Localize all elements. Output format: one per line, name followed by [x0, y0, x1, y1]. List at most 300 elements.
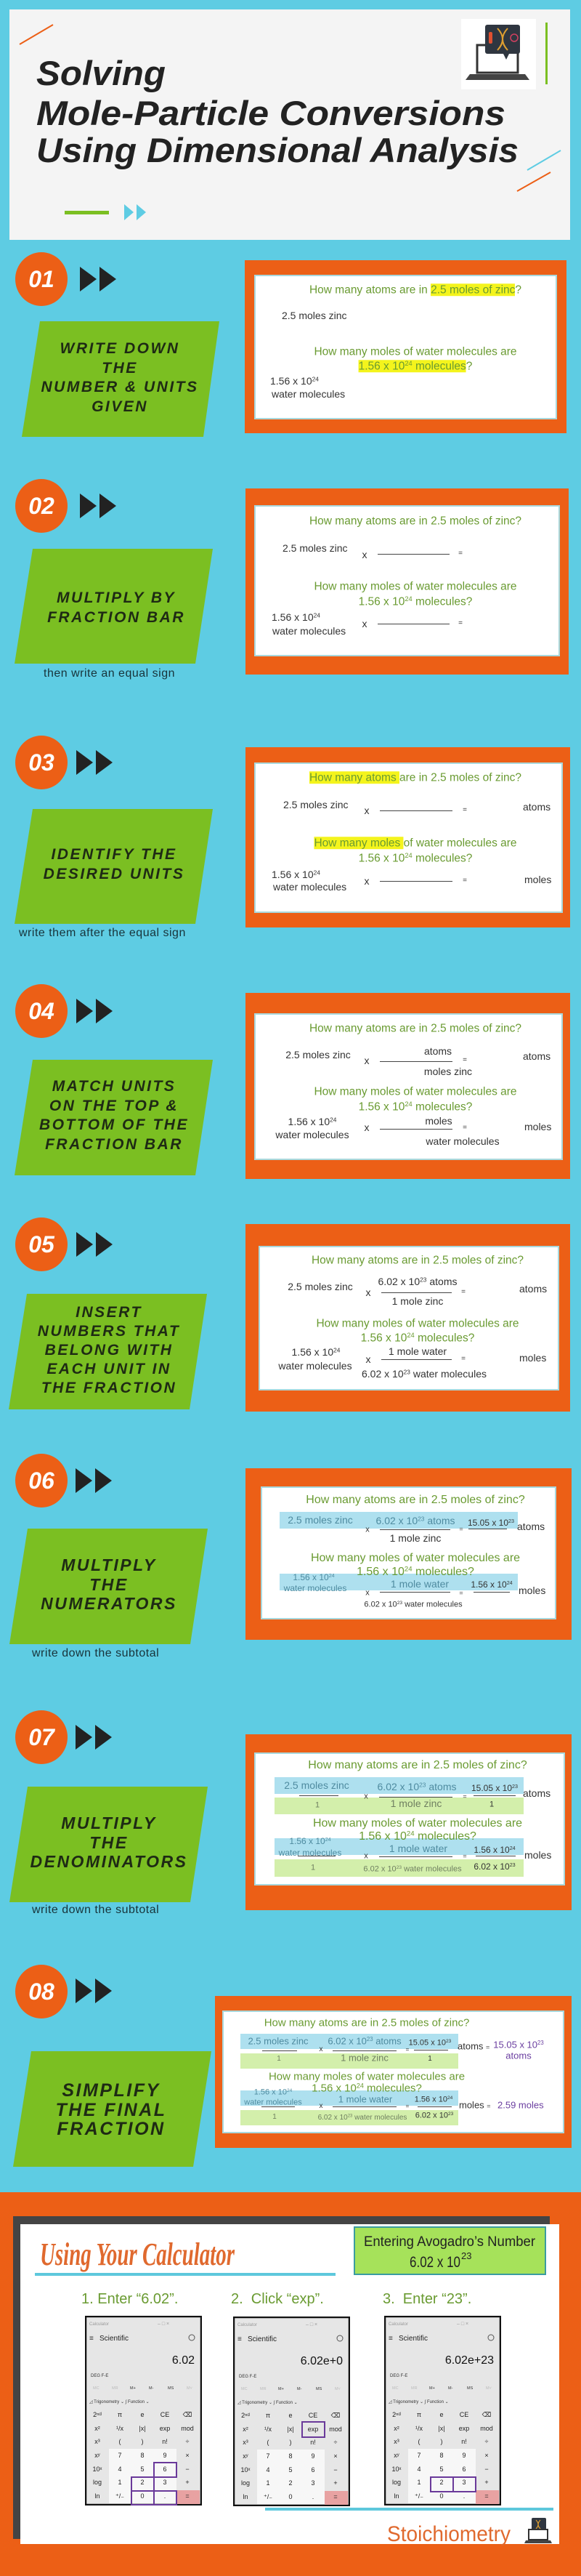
title: Solving — [36, 54, 166, 92]
calculator 2: 6 — [311, 2466, 315, 2474]
step 02: = — [458, 619, 463, 627]
step 08: 1.56 x 1024 — [254, 2088, 292, 2096]
badge 03: 03 — [28, 749, 54, 775]
calculator 3: M˅ — [486, 2386, 492, 2391]
step 04: MATCH UNITS — [52, 1078, 176, 1095]
calculator 3: 0 — [439, 2492, 444, 2500]
calculator 3: π — [417, 2411, 421, 2418]
calculator 3: 5 — [439, 2466, 444, 2473]
example panel 04 — [245, 993, 570, 1179]
calculator 1: xʸ — [94, 2452, 100, 2459]
calculator 1: mod — [181, 2425, 194, 2432]
calculator 3: 3 — [462, 2479, 466, 2486]
step 07: 1.56 x 1024 — [474, 1845, 516, 1855]
step 05: x — [366, 1353, 370, 1365]
calculator 1: |x| — [139, 2425, 146, 2432]
calculator 1: 10ˣ — [93, 2466, 102, 2473]
step 03 — [15, 736, 570, 939]
calculator 3: ◿ Trigonometry ⌄ ∫ Function ⌄ — [389, 2399, 449, 2404]
step 05: atoms — [519, 1283, 547, 1295]
step 01 — [15, 252, 566, 437]
step 03: = — [463, 877, 467, 885]
step 07: 6.02 x 1023 atoms — [378, 1781, 456, 1792]
calculator 3: 7 — [417, 2452, 421, 2459]
calculator 3: ⁺/₋ — [415, 2492, 423, 2500]
calculator 3: 2 — [439, 2479, 444, 2486]
step 06 — [9, 1454, 572, 1659]
calculator 1: = — [185, 2492, 190, 2500]
step 04: water molecules — [426, 1135, 500, 1147]
calculator 1: ) — [141, 2438, 144, 2445]
badge 07: 07 — [28, 1724, 54, 1750]
arrows — [76, 1468, 112, 1493]
calculator 1: n! — [162, 2438, 168, 2445]
badge 06: 06 — [28, 1467, 54, 1493]
step 01: 1.56 x 1024 molecules? — [359, 360, 472, 372]
step 04: moles — [524, 1121, 551, 1132]
badge 05: 05 — [28, 1231, 54, 1257]
calculator 3: 2ⁿᵈ — [392, 2411, 401, 2418]
calculator 2: x² — [243, 2426, 248, 2433]
calculator 3: − — [484, 2466, 489, 2473]
step 08: 15.05 x 1023 — [409, 2038, 451, 2047]
calculator 3: e — [439, 2411, 444, 2418]
step 07: 1.56 x 1024 molecules? — [359, 1830, 476, 1843]
step 05: x — [366, 1287, 370, 1298]
step 05: 6.02 x 1023 atoms — [378, 1276, 457, 1287]
step 06: = — [459, 1525, 463, 1532]
calculator 2: 4 — [266, 2466, 270, 2474]
step 02: = — [458, 550, 463, 558]
step 02: x — [362, 549, 367, 560]
badge 03 — [15, 736, 68, 789]
step 04: atoms — [523, 1050, 550, 1062]
calculator 3: n! — [461, 2438, 467, 2445]
calculator 3: 8 — [439, 2452, 444, 2459]
step 07: atoms — [523, 1787, 550, 1799]
step 08: How many atoms are in 2.5 moles of zinc? — [264, 2016, 469, 2029]
calculator 1: + — [185, 2479, 190, 2486]
calculator section — [0, 2192, 581, 2576]
calculator 2: ÷ — [334, 2439, 338, 2446]
calculator 2: x³ — [243, 2439, 248, 2446]
calculator 3: CE — [460, 2411, 468, 2418]
calculator 3: ln — [394, 2492, 399, 2500]
step 07: 15.05 x 1023 — [471, 1783, 518, 1793]
badge 04 — [15, 984, 68, 1038]
label: multiply numerators — [9, 1529, 208, 1644]
calculator 1: e — [140, 2411, 145, 2418]
label: write down — [22, 321, 220, 437]
badge 02: 02 — [28, 493, 54, 519]
calculator 2: ⁺/₋ — [264, 2493, 272, 2500]
example panel 08 — [215, 1996, 572, 2148]
calculator 2: mod — [329, 2426, 342, 2433]
step 05: 1.56 x 1024 — [292, 1346, 340, 1358]
step 08: 1 mole zinc — [341, 2053, 389, 2063]
step 02: 2.5 moles zinc — [283, 542, 347, 554]
calculator 2: M+ — [278, 2387, 284, 2391]
step 03: = — [463, 806, 467, 814]
title: Using Dimensional Analysis — [36, 131, 519, 169]
step 02: 1.56 x 1024 molecules? — [359, 595, 472, 608]
calculator 3 — [384, 2316, 501, 2505]
calculator 2: DEG F-E — [239, 2375, 256, 2379]
step 03: x — [365, 875, 369, 887]
calculator 2: ◿ Trigonometry ⌄ ∫ Function ⌄ — [237, 2400, 298, 2405]
step 01: water molecules — [272, 388, 345, 400]
step 04 — [15, 984, 570, 1179]
calculator 3: DEG F-E — [390, 2374, 407, 2378]
step 05: = — [461, 1355, 466, 1363]
calculator 1: ⌫ — [183, 2411, 192, 2418]
step 08: moles = — [459, 2099, 491, 2111]
step 08: 2.59 moles — [497, 2099, 544, 2111]
calculator 3: ≡ — [389, 2335, 393, 2343]
example panel 06 — [245, 1468, 572, 1640]
step 07: MULTIPLY — [61, 1814, 157, 1832]
step 03: How many atoms are in 2.5 moles of zinc? — [309, 771, 521, 784]
step 06: water molecules — [284, 1583, 346, 1593]
step 06: 1.56 x 1024 — [471, 1579, 513, 1590]
step 05: = — [461, 1288, 466, 1296]
step 03: water molecules — [273, 881, 346, 893]
calculator 2 — [233, 2317, 350, 2506]
step 06: How many moles of water molecules are — [311, 1552, 520, 1564]
calculator 1: ≡ — [89, 2335, 94, 2343]
calculator 2: 5 — [288, 2466, 293, 2474]
subtitle: write down the subtotal — [32, 1647, 159, 1659]
calculator 1: 3 — [163, 2479, 167, 2486]
step 07: x — [364, 1852, 368, 1861]
calculator 2: 8 — [288, 2452, 293, 2460]
header panel — [9, 9, 570, 240]
calculator 2: MR — [260, 2387, 267, 2391]
calculator 3: |x| — [438, 2425, 445, 2432]
step 04: = — [463, 1124, 467, 1132]
calculator 1: 2ⁿᵈ — [93, 2411, 102, 2418]
calculator 3: Scientific — [399, 2335, 428, 2343]
step 05: EACH UNIT IN — [46, 1361, 171, 1377]
step 06: 1 mole water — [391, 1578, 449, 1590]
step 06: 2.5 moles zinc — [288, 1514, 353, 1526]
step 07: 1 — [315, 1801, 320, 1810]
step 05: 6.02 x 1023 water molecules — [362, 1368, 487, 1380]
step 01: 1.56 x 1024 — [270, 375, 319, 387]
decoration: dash and arrows — [65, 211, 109, 214]
step 04: FRACTION BAR — [45, 1135, 183, 1153]
step 08: = — [406, 2103, 409, 2109]
step 06: 1.56 x 1024 — [293, 1572, 335, 1582]
calculator 2: 7 — [266, 2452, 270, 2460]
calculator 1: M˅ — [187, 2386, 192, 2391]
calculator 2: 10ˣ — [241, 2466, 251, 2474]
step 05: 1 mole zinc — [392, 1295, 443, 1307]
step 08: atoms = — [458, 2041, 489, 2051]
subtitle: then write an equal sign — [44, 667, 175, 680]
calculator 3: 6 — [462, 2466, 466, 2473]
step 03: How many moles of water molecules are — [314, 837, 517, 849]
calculator 3: . — [463, 2492, 465, 2500]
step 08: 6.02 x 1023 — [415, 2111, 453, 2120]
step 01: GIVEN — [92, 398, 148, 414]
step 08: = — [406, 2046, 409, 2053]
example panel 03 — [245, 747, 570, 927]
step 04: How many atoms are in 2.5 moles of zinc? — [309, 1022, 521, 1034]
calculator 3: MR — [411, 2386, 418, 2391]
step 01: How many atoms are in 2.5 moles of zinc? — [309, 283, 521, 296]
step 07: 1 — [489, 1800, 494, 1808]
calculator 2: Calculator — [237, 2323, 257, 2327]
calculator 3: 6.02e+23 — [445, 2354, 494, 2367]
step 07: = — [463, 1852, 467, 1859]
example panel 05 — [245, 1224, 570, 1412]
calculator 3: MS — [467, 2386, 474, 2391]
calculator 2: log — [241, 2479, 250, 2487]
label: insert numbers — [9, 1294, 208, 1409]
step 05: 1.56 x 1024 molecules? — [361, 1332, 474, 1344]
badge 01: 01 — [28, 266, 54, 292]
step 04: atoms — [424, 1045, 452, 1057]
badge 05 — [15, 1217, 68, 1271]
arrows — [76, 999, 113, 1023]
arrows — [76, 1232, 113, 1257]
step 08: 6.02 x 1023 water molecules — [318, 2114, 407, 2122]
calculator 2: M˅ — [335, 2387, 341, 2391]
step 02: FRACTION BAR — [47, 609, 185, 625]
calculator 1: 2 — [140, 2479, 145, 2486]
step 01: How many moles of water molecules are — [314, 345, 517, 358]
arrows — [80, 494, 116, 518]
step 02 — [15, 479, 569, 680]
badge 02 — [15, 479, 68, 533]
callout: avogadro's number — [354, 2226, 546, 2275]
badge 06 — [15, 1454, 68, 1508]
step 08: 1 — [272, 2113, 277, 2121]
step 05: water molecules — [278, 1360, 352, 1372]
calculator 2: ( — [267, 2439, 269, 2446]
calculator 3: – □ × — [457, 2322, 468, 2327]
example panel 02 — [245, 488, 569, 675]
icon: small laptop — [524, 2518, 552, 2543]
calculator 1: log — [93, 2479, 102, 2486]
calculator 3: 9 — [462, 2452, 466, 2459]
step 04: = — [463, 1056, 467, 1064]
calculator 1: ¹/x — [116, 2425, 123, 2432]
step 08: water molecules — [244, 2098, 302, 2106]
label: match units — [15, 1060, 214, 1175]
calculator 3: xʸ — [394, 2452, 399, 2459]
step 07: moles — [524, 1849, 551, 1861]
step 06: MULTIPLY — [61, 1555, 157, 1574]
step 03: IDENTIFY THE — [51, 846, 177, 863]
step 08: SIMPLIFY — [62, 2080, 161, 2101]
step 08: 1.56 x 1024 molecules? — [312, 2082, 422, 2095]
step 01: THE — [102, 359, 138, 377]
calculator 2: . — [312, 2493, 314, 2500]
calculator 2: ≡ — [237, 2335, 242, 2343]
step 03: 2.5 moles zinc — [283, 799, 348, 810]
calculator 1: ÷ — [186, 2438, 190, 2445]
calculator 3: 4 — [417, 2466, 421, 2473]
step 07: = — [463, 1792, 467, 1800]
calculator 3: ⌫ — [482, 2411, 492, 2418]
calculator 1: x² — [94, 2425, 100, 2432]
calculator 2: exp — [308, 2426, 318, 2433]
calculator 3: ¹/x — [415, 2425, 423, 2432]
step 07: 1 mole water — [389, 1843, 447, 1854]
step 08: 1 — [428, 2055, 432, 2063]
step 04: x — [365, 1122, 369, 1133]
calculator 3: x² — [394, 2425, 399, 2432]
calculator 2: M- — [297, 2387, 302, 2391]
calculator 1: Calculator — [89, 2322, 109, 2327]
calculator 3: mod — [480, 2425, 493, 2432]
step 05: THE FRACTION — [41, 1380, 176, 1396]
calculator 1: 5 — [140, 2466, 145, 2473]
calculator 2: xʸ — [243, 2452, 248, 2460]
step 04: moles zinc — [424, 1066, 472, 1077]
calculator section: 3. Enter “23”. — [383, 2291, 471, 2307]
step 07: How many moles of water molecules are — [313, 1817, 522, 1830]
calculator 2: ⌫ — [331, 2412, 341, 2419]
step 07: x — [364, 1792, 368, 1801]
step 02: MULTIPLY BY — [57, 589, 176, 606]
callout: avogadro's number: 23 — [461, 2250, 471, 2261]
calculator 2: Scientific — [248, 2335, 277, 2343]
calculator 1: ( — [119, 2438, 121, 2445]
step 07: 1 — [311, 1864, 315, 1872]
calculator 2: − — [333, 2466, 338, 2474]
step 08 — [13, 1965, 572, 2167]
step 07: 2.5 moles zinc — [284, 1779, 349, 1791]
calculator 1: MC — [93, 2386, 99, 2391]
step 08: 6.02 x 1023 atoms — [328, 2035, 402, 2047]
calculator 3: MC — [392, 2386, 399, 2391]
calculator 2: |x| — [287, 2426, 294, 2433]
calculator section: 2. Click “exp”. — [231, 2291, 324, 2307]
step 07: 1.56 x 1024 — [289, 1836, 331, 1846]
calculator 2: 6.02e+0 — [301, 2355, 343, 2367]
step 05: INSERT — [76, 1304, 142, 1321]
calculator 1: × — [185, 2452, 190, 2459]
step 01: 2.5 moles zinc — [282, 310, 346, 321]
calculator 2: ) — [289, 2439, 292, 2446]
step 04: BOTTOM OF THE — [39, 1116, 189, 1133]
step 08: atoms — [505, 2050, 532, 2061]
calculator 2: n! — [310, 2439, 316, 2446]
arrows — [76, 750, 113, 775]
calculator 2: 0 — [288, 2493, 293, 2500]
example panel 01 — [245, 260, 566, 433]
calculator 2: = — [333, 2493, 338, 2500]
footer: stoichiometry: Stoichiometry — [387, 2522, 511, 2546]
calculator 3: ( — [418, 2438, 420, 2445]
step 07: 6.02 x 1023 — [474, 1861, 516, 1872]
step 01: WRITE DOWN — [60, 340, 179, 357]
step 03: moles — [524, 874, 551, 885]
calculator 2: – □ × — [306, 2322, 317, 2327]
calculator 2: π — [266, 2412, 270, 2419]
step 06: x — [365, 1589, 370, 1598]
calculator 1: MR — [112, 2386, 118, 2391]
calculator 3: M- — [448, 2386, 453, 2391]
calculator 1: 0 — [140, 2492, 145, 2500]
calculator 3: exp — [459, 2425, 469, 2432]
step 04: water molecules — [275, 1129, 349, 1140]
step 06: 6.02 x 1023 water molecules — [364, 1601, 463, 1609]
step 03: x — [365, 805, 369, 816]
subtitle: write them after the equal sign — [19, 927, 186, 939]
arrows — [76, 1725, 112, 1750]
title: Mole-Particle Conversions — [36, 94, 505, 132]
callout: avogadro's number: Entering Avogadro’s Number — [364, 2234, 536, 2250]
label: simplify final fraction — [13, 2051, 212, 2167]
step 06: NUMERATORS — [41, 1594, 177, 1613]
step 07: water molecules — [279, 1848, 341, 1858]
label: identify desired units — [15, 809, 214, 924]
step 06: THE — [89, 1574, 129, 1593]
calculator 3: 1 — [417, 2479, 421, 2486]
step 08: How many moles of water molecules are — [269, 2070, 465, 2083]
step 04: x — [365, 1055, 369, 1066]
calculator 1: exp — [160, 2425, 170, 2432]
calculator 2: 1 — [266, 2479, 270, 2487]
calculator 3: 10ˣ — [392, 2466, 402, 2473]
calculator 1 — [85, 2316, 202, 2505]
icon: laptop with science bubble — [461, 19, 536, 89]
calculator 1: π — [118, 2411, 122, 2418]
step 08: 1.56 x 1024 — [415, 2095, 452, 2104]
calculator 1: M+ — [130, 2386, 136, 2391]
calculator 1: 1 — [118, 2479, 122, 2486]
calculator 2: CE — [309, 2412, 317, 2419]
calculator 3: x³ — [394, 2438, 399, 2445]
step 05 — [9, 1217, 570, 1412]
step 04: 2.5 moles zinc — [285, 1049, 351, 1060]
step 08: 1 — [277, 2055, 281, 2063]
title — [36, 54, 519, 169]
calculator 1: CE — [161, 2411, 169, 2418]
step 01: NUMBER & UNITS — [41, 379, 199, 395]
step 06: moles — [519, 1585, 545, 1596]
step 05: How many atoms are in 2.5 moles of zinc? — [312, 1254, 524, 1266]
step 02: x — [362, 618, 367, 629]
calculator 1: DEG F-E — [91, 2374, 108, 2378]
example panel 07 — [245, 1734, 572, 1910]
calculator 1: ln — [94, 2492, 100, 2500]
calculator 2: 3 — [311, 2479, 315, 2487]
step 07: 6.02 x 1023 water molecules — [363, 1865, 462, 1874]
calculator 3: = — [484, 2492, 489, 2500]
calculator 1: 6.02 — [172, 2354, 195, 2367]
step 03: atoms — [523, 801, 550, 813]
calculator 3: log — [392, 2479, 401, 2486]
step 08: x — [320, 2045, 322, 2053]
calculator 2: × — [333, 2452, 338, 2460]
calculator 1: – □ × — [158, 2322, 169, 2327]
badge 08: 08 — [28, 1979, 54, 2005]
step 08: 2.5 moles zinc — [248, 2035, 309, 2047]
arrows — [80, 267, 116, 291]
step 06: x — [365, 1525, 370, 1534]
calculator 1: Scientific — [99, 2335, 129, 2343]
step 06: 1.56 x 1024 molecules? — [357, 1566, 474, 1578]
label: multiply denominators — [9, 1787, 208, 1902]
calculator 2: ln — [243, 2493, 248, 2500]
step 05: moles — [519, 1352, 546, 1364]
step 07 — [9, 1710, 572, 1916]
